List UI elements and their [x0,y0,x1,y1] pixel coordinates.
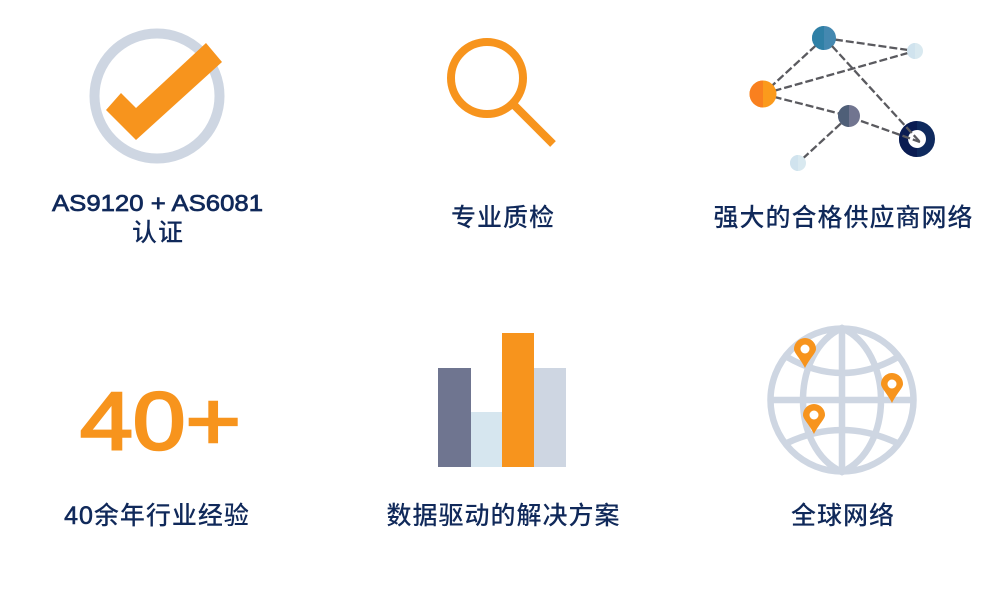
icon: check mark in ring [94,34,222,158]
heading: AS9120 + AS6081 certification: 认证 [132,219,184,247]
heading: data driven solutions: 数据驱动的解决方案 [386,502,621,530]
big number: 40+: 40+ [80,376,241,467]
icon: globe with pins [770,328,914,472]
node: orange [750,80,776,108]
icon: supplier network [750,26,930,171]
heading: global network: 全球网络 [791,502,895,530]
heading: 40 years experience: 40余年行业经验 [64,502,250,530]
node: navy ring [899,121,930,157]
icon: pin north-west [794,338,816,368]
heading: AS9120 + AS6081 certification: AS9120 + AS6081 [52,190,263,216]
icon: magnifying glass [451,42,553,144]
node: blue [812,26,836,50]
icon: pin east [881,373,903,403]
node: grey [838,105,860,127]
icon: pin south-west [803,404,825,434]
node: light bottom [790,155,806,171]
node: light top right [907,43,923,59]
heading: AS9120 + AS6081 certification [52,190,263,247]
heading: strong supplier network: 强大的合格供应商网络 [713,204,974,232]
bar chart [438,333,566,467]
heading: professional QC: 专业质检 [451,204,555,232]
